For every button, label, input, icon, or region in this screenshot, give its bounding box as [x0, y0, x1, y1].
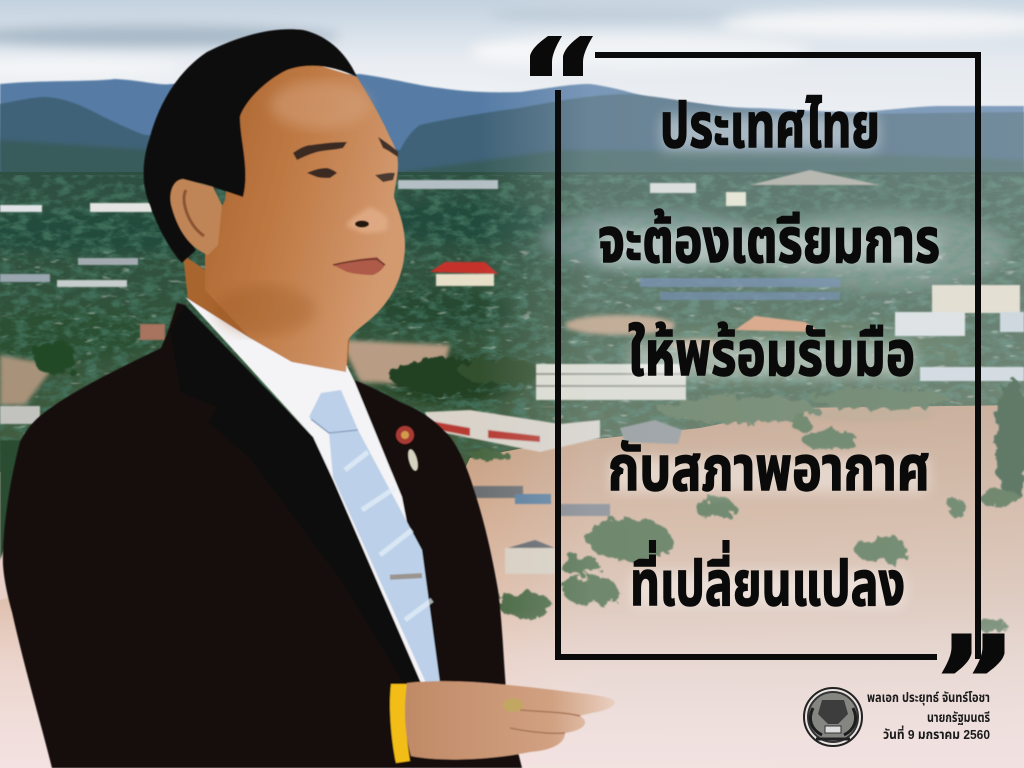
- lapel pins: [396, 426, 420, 472]
- nose: [346, 207, 388, 233]
- forest and village texture: [0, 172, 1024, 472]
- suit jacket: [3, 303, 522, 768]
- headline quote text: กับสภาพอากาศ: [608, 435, 930, 504]
- brown flood patches in the town: [565, 315, 935, 422]
- frame left and bottom: [555, 90, 937, 660]
- face: [205, 55, 405, 372]
- closing quote mark: [942, 634, 1004, 674]
- tie knot shadow: [311, 419, 358, 433]
- jaw shadow: [215, 285, 315, 335]
- frame top and right: [595, 52, 981, 659]
- headline quote text: ให้พร้อมรับมือ: [628, 320, 915, 389]
- necktie stripes: [345, 452, 432, 620]
- headline quote text: ประเทศไทย: [660, 92, 880, 161]
- white glow behind the headline: [600, 116, 938, 606]
- signature text: name, title, date: นายกรัฐมนตรี: [927, 710, 990, 725]
- neck: [183, 255, 350, 400]
- necktie: [309, 390, 440, 683]
- forehead highlight: [270, 81, 370, 129]
- buildings in the town: [0, 170, 1024, 381]
- headline quote text: [598, 92, 940, 619]
- opening quote mark: [530, 36, 593, 76]
- headline quote text: ที่เปลี่ยนแปลง: [630, 540, 905, 619]
- left lapel shading: [170, 306, 424, 690]
- signature text: name, title, date: [867, 690, 990, 742]
- government seal emblem: [804, 688, 862, 746]
- left forest below shoulder: [0, 440, 30, 560]
- tie clip: [390, 573, 422, 580]
- pale fade at the bottom: [0, 610, 1024, 768]
- near mountains: [0, 94, 1024, 200]
- green land: [0, 172, 1024, 472]
- signature text: name, title, date: พลเอก ประยุทธ์ จันทร์โอชา: [867, 690, 990, 705]
- headline quote text: จะต้องเตรียมการ: [598, 207, 940, 276]
- portrait: man in dark suit: [3, 29, 615, 768]
- finger creases: [510, 710, 580, 733]
- hill base: [0, 140, 1024, 215]
- sky with clouds: [0, 0, 1024, 125]
- haze over the right of the photo: [480, 0, 1024, 768]
- white shirt collar and front: [185, 297, 440, 690]
- flooded trees and buildings: [0, 341, 1024, 633]
- ear: [170, 179, 222, 255]
- quote frame: [530, 36, 1004, 674]
- hand: [405, 681, 615, 759]
- far mountains: [0, 74, 1024, 200]
- flood water: [0, 405, 1024, 768]
- mouth: [333, 257, 385, 275]
- eyes: [307, 168, 337, 178]
- eyebrows: [293, 142, 347, 160]
- hair: [144, 29, 357, 263]
- signature text: name, title, date: วันที่ 9 มกราคม 2560: [883, 725, 990, 742]
- gold ring: [503, 698, 523, 712]
- yellow wristband: [390, 684, 410, 763]
